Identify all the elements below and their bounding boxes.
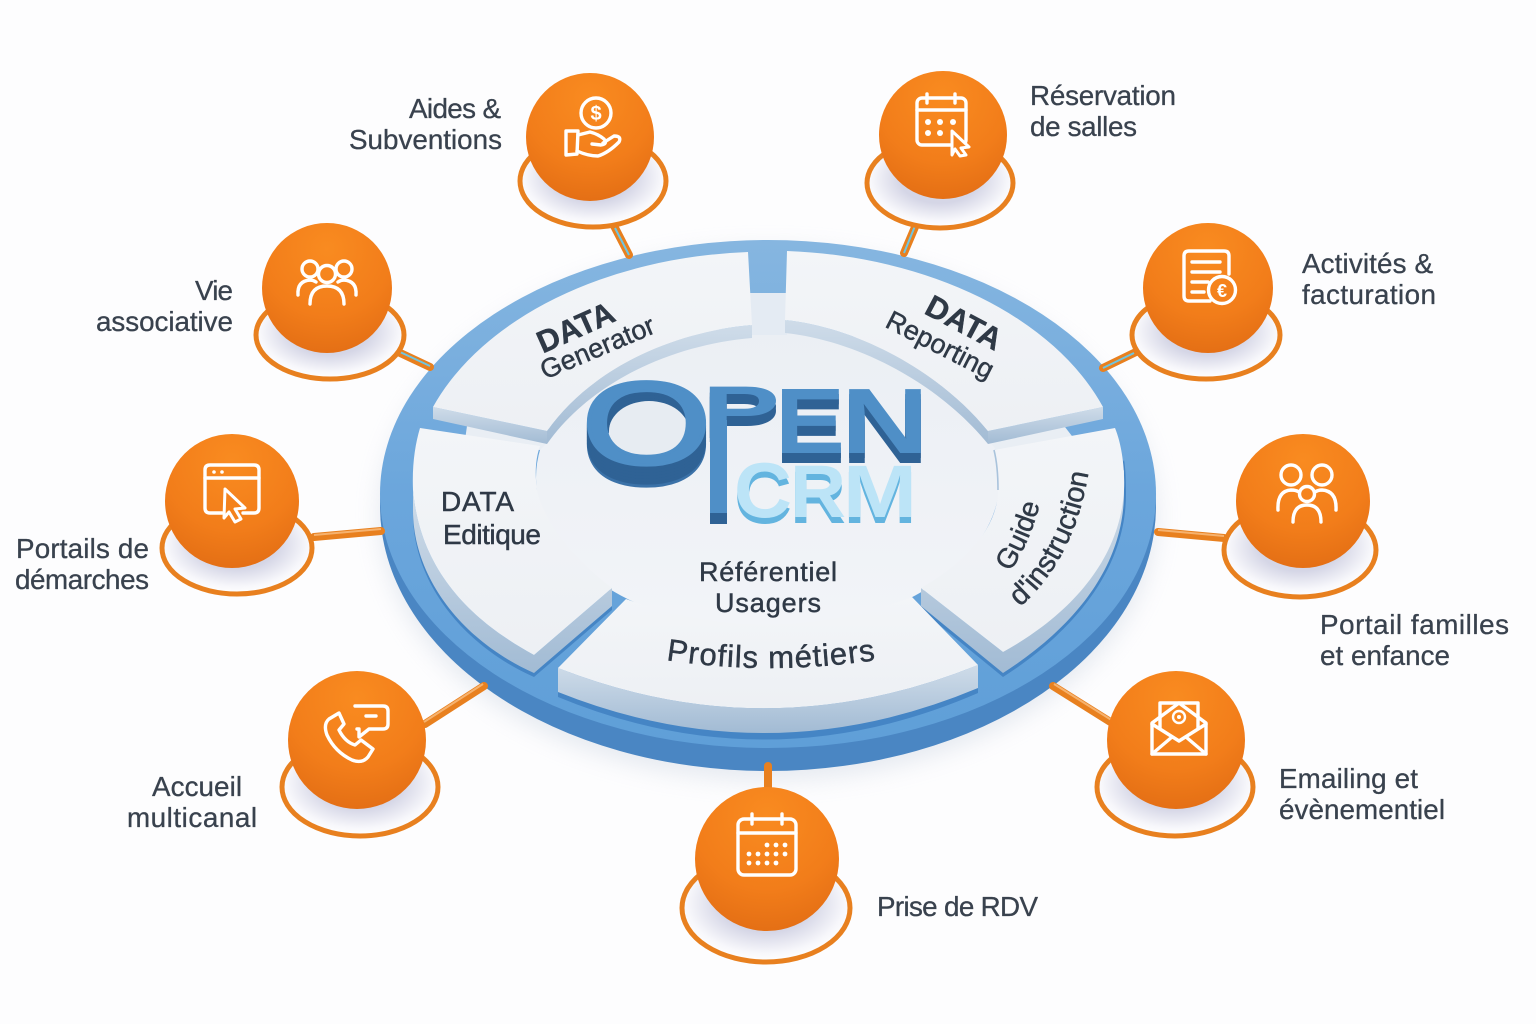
logo word: OPEN: E bbox=[775, 379, 845, 483]
logo word: CRM: R bbox=[790, 450, 846, 533]
logo word: OPEN: O bbox=[581, 379, 712, 511]
label: Réservation de salles bbox=[1030, 80, 1176, 142]
label: Portail familles et enfance: Portail familles bbox=[1320, 609, 1509, 640]
label: Portail familles et enfance: et enfance bbox=[1320, 640, 1450, 671]
label: Vie associative: associative bbox=[96, 306, 233, 337]
logo word: CRM: M bbox=[843, 456, 917, 539]
label: Vie associative: Vie bbox=[195, 275, 233, 306]
label: Portails de démarches: Portails de bbox=[16, 533, 149, 564]
logo word: OPEN: P bbox=[702, 372, 780, 446]
label: Portail familles et enfance bbox=[1320, 609, 1509, 671]
label: DATA Generator: Generator bbox=[536, 310, 659, 385]
logo word: OPEN: N bbox=[841, 369, 929, 473]
logo word: OPEN: N bbox=[841, 374, 929, 478]
node: Accueil multicanal bbox=[127, 671, 484, 836]
label: DATA Editique: DATA bbox=[441, 486, 514, 517]
label: Aides & Subventions: Aides & bbox=[409, 93, 501, 124]
label: Référentiel Usagers bbox=[699, 557, 837, 618]
label: Activités & facturation bbox=[1302, 248, 1436, 310]
icon: browser window with cursor bbox=[205, 465, 259, 522]
icon: calendar with cursor bbox=[917, 94, 969, 156]
logo word: OPEN: O bbox=[581, 367, 712, 499]
label: Emailing et évènementiel: Emailing et bbox=[1279, 763, 1418, 794]
label: DATA Editique bbox=[441, 486, 541, 550]
icon: invoice with euro bbox=[1184, 251, 1236, 304]
label: Guide d'instruction: d'instruction bbox=[1012, 472, 1088, 604]
label: Référentiel Usagers: Usagers bbox=[715, 588, 821, 618]
label: Activités & facturation: facturation bbox=[1302, 279, 1436, 310]
icon: invoice with euro: € bbox=[1217, 281, 1227, 301]
label: Emailing et évènementiel bbox=[1279, 763, 1445, 825]
platform: central blue disc bbox=[380, 240, 1156, 780]
label: Référentiel Usagers: Référentiel bbox=[699, 557, 837, 587]
node: Vie associative bbox=[96, 223, 430, 379]
logo word: OPEN bbox=[581, 358, 929, 524]
logo word: OPEN: P bbox=[702, 378, 780, 452]
label: Accueil multicanal: Accueil bbox=[152, 771, 242, 802]
logo: Open CRM bbox=[581, 358, 929, 540]
icon: group of people bbox=[298, 261, 356, 304]
label: Profils métiers: Profils métiers bbox=[668, 639, 874, 668]
logo word: OPEN: O bbox=[581, 370, 712, 502]
logo word: CRM bbox=[734, 446, 917, 540]
logo word: OPEN: E bbox=[775, 374, 845, 478]
label: Guide d'instruction: Guide bbox=[997, 502, 1039, 568]
label: Réservation de salles: Réservation bbox=[1030, 80, 1176, 111]
label: Profils métiers bbox=[668, 639, 874, 668]
label: Emailing et évènementiel: évènementiel bbox=[1279, 794, 1445, 825]
logo word: OPEN: N bbox=[841, 379, 929, 483]
label: Activités & facturation: Activités & bbox=[1302, 248, 1433, 279]
node: Portail familles et enfance bbox=[1158, 434, 1509, 671]
node: Réservation de salles bbox=[867, 71, 1176, 253]
logo word: CRM: C bbox=[734, 446, 792, 534]
node: Emailing et évènementiel bbox=[1053, 671, 1445, 836]
logo word: OPEN: O bbox=[581, 358, 712, 490]
segment: Profils métiers bbox=[558, 597, 978, 740]
segment: DATA Generator bbox=[433, 252, 752, 444]
icon: hand with coin bbox=[566, 98, 620, 156]
label: Portails de démarches bbox=[15, 533, 149, 595]
icon: open envelope bbox=[1152, 703, 1206, 754]
label: Portails de démarches: démarches bbox=[15, 564, 149, 595]
label: DATA Reporting: DATA bbox=[920, 288, 1008, 357]
label: Réservation de salles: de salles bbox=[1030, 111, 1137, 142]
segment: DATA Editique bbox=[413, 428, 612, 677]
label: Aides & Subventions bbox=[349, 93, 502, 155]
node: Aides & Subventions bbox=[349, 73, 666, 255]
label: DATA Editique: Editique bbox=[443, 519, 541, 550]
icon: phone and speech bubble bbox=[325, 706, 388, 761]
node: Portails de démarches bbox=[15, 434, 381, 595]
logo word: OPEN: P bbox=[702, 382, 780, 456]
logo word: OPEN: O bbox=[581, 364, 712, 496]
node: Prise de RDV bbox=[682, 766, 1038, 962]
logo word: OPEN: O bbox=[581, 361, 712, 493]
label: Accueil multicanal bbox=[127, 771, 257, 833]
label: Prise de RDV: Prise de RDV bbox=[877, 891, 1038, 922]
logo word: CRM: C bbox=[734, 452, 792, 540]
logo word: OPEN: O bbox=[581, 373, 712, 505]
icon: family bbox=[1278, 465, 1336, 522]
logo word: CRM: M bbox=[843, 450, 917, 533]
node: Activités & facturation bbox=[1103, 223, 1436, 379]
logo word: OPEN: O bbox=[581, 376, 712, 508]
logo word: OPEN: E bbox=[775, 369, 845, 473]
label: DATA Generator: DATA bbox=[531, 295, 620, 360]
label: Aides & Subventions: Subventions bbox=[349, 124, 502, 155]
segment: DATA Reporting bbox=[785, 251, 1103, 444]
label: Vie associative bbox=[96, 275, 233, 337]
icon: calendar bbox=[738, 814, 796, 875]
label: DATA Reporting: Reporting bbox=[881, 305, 999, 385]
label: Accueil multicanal: multicanal bbox=[127, 802, 257, 833]
logo word: CRM: R bbox=[790, 456, 846, 539]
icon: hand with coin: $ bbox=[590, 103, 602, 125]
segment: Guide d'instruction bbox=[921, 428, 1126, 677]
